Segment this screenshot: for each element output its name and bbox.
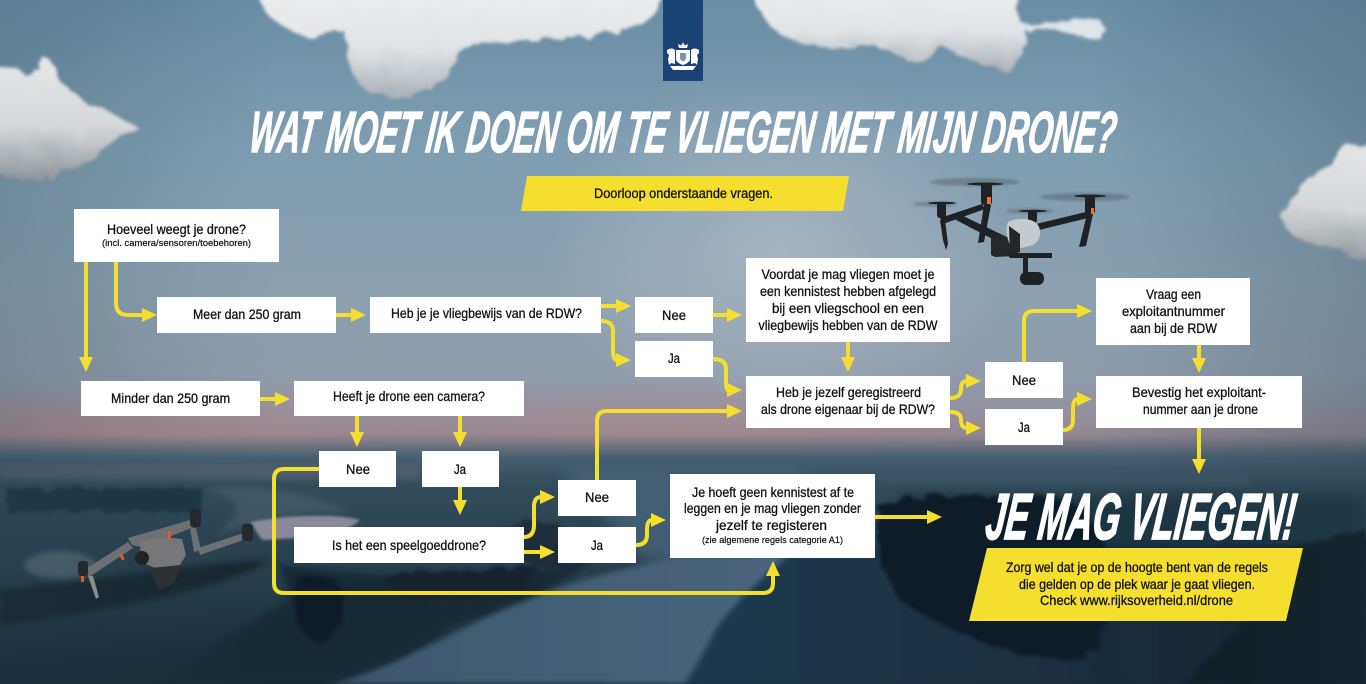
callout: regels ter plekke: Check www.rijksoverheid.nl/drone <box>1040 592 1233 608</box>
step: exploitantnummer aanvragen: Vraag een <box>1146 286 1201 302</box>
subtitle banner <box>521 176 849 211</box>
callout: regels ter plekke: die gelden op de plek waar je gaat vliegen. <box>1019 576 1255 592</box>
step: exploitantnummer bevestigen <box>1096 376 1302 428</box>
step: exploitantnummer aanvragen: exploitantnummer <box>1122 303 1225 319</box>
step: geregistreerd als eigenaar: Heb je jezelf geregistreerd <box>776 384 921 400</box>
step: exploitantnummer aanvragen <box>1096 278 1250 345</box>
step: geen kennistest: jezelf te registeren <box>715 517 827 533</box>
step: Nee speelgoeddrone: Nee <box>585 489 609 505</box>
step: Meer dan 250 gram <box>157 297 336 333</box>
step: Ja geregistreerd <box>985 409 1063 445</box>
step: kennistest <box>746 258 950 342</box>
step: Nee vliegbewijs <box>635 297 713 333</box>
cloud: top right <box>750 0 1108 70</box>
step: Ja speelgoeddrone <box>558 527 636 563</box>
step: kennistest: een kennistest hebben afgelegd <box>760 283 936 299</box>
step: kennistest: vliegbewijs hebben van de RDW <box>758 317 938 333</box>
cloud: right <box>1282 140 1366 262</box>
step: Heeft je drone een camera <box>294 381 524 416</box>
step: Minder dan 250 gram: Minder dan 250 gram <box>111 390 230 406</box>
icon: small drone bottom left <box>24 509 253 599</box>
step: exploitantnummer bevestigen: Bevestig het exploitant- <box>1132 384 1266 400</box>
step: Nee geregistreerd: Nee <box>1012 372 1036 388</box>
cloud: top left <box>258 0 660 97</box>
step: speelgoeddrone: Is het een speelgoeddrone? <box>332 537 486 553</box>
step: Hoeveel weegt je drone: Hoeveel weegt je drone? <box>107 221 246 237</box>
logo: Rijksoverheid crest <box>663 0 703 81</box>
step: Nee speelgoeddrone <box>558 480 636 516</box>
icon: large drone top right <box>913 178 1130 285</box>
callout: regels ter plekke <box>969 548 1303 621</box>
step: Heb je je vliegbewijs: Heb je je vliegbewijs van de RDW? <box>391 305 582 321</box>
flowchart arrows <box>86 262 1199 593</box>
step: geen kennistest: Je hoeft geen kennistest af te <box>692 484 854 500</box>
step: Nee geregistreerd <box>985 362 1063 398</box>
step: Ja camera <box>422 451 499 487</box>
step: geen kennistest: leggen en je mag vliegen zonder <box>684 500 861 516</box>
cloud: left <box>0 59 138 180</box>
step: Ja camera: Ja <box>454 461 466 477</box>
step: geen kennistest <box>670 474 875 558</box>
step: geen kennistest: (zie algemene regels categorie A1) <box>702 535 843 546</box>
subtitle banner: Doorloop onderstaande vragen. <box>594 185 773 201</box>
step: Meer dan 250 gram: Meer dan 250 gram <box>193 306 301 322</box>
step: Hoeveel weegt je drone <box>74 209 279 262</box>
step: Hoeveel weegt je drone: (incl. camera/sensoren/toebehoren) <box>102 238 251 249</box>
callout: regels ter plekke: Zorg wel dat je op de hoogte bent van de regels <box>1006 559 1268 575</box>
step: kennistest: bij een vliegschool en een <box>772 300 924 316</box>
step: speelgoeddrone <box>294 527 524 563</box>
step: Ja speelgoeddrone: Ja <box>591 537 603 553</box>
step: Ja vliegbewijs <box>635 341 713 377</box>
step: Heeft je drone een camera: Heeft je drone een camera? <box>333 388 485 404</box>
step: kennistest: Voordat je mag vliegen moet je <box>762 266 935 282</box>
step: Ja geregistreerd: Ja <box>1018 419 1030 435</box>
step: geregistreerd als eigenaar <box>746 376 950 428</box>
step: Ja vliegbewijs: Ja <box>668 350 680 366</box>
step: Heb je je vliegbewijs <box>370 297 601 333</box>
step: Minder dan 250 gram <box>81 381 260 416</box>
step: Nee camera: Nee <box>346 461 370 477</box>
step: geregistreerd als eigenaar: als drone eigenaar bij de RDW? <box>761 401 935 417</box>
step: Nee vliegbewijs: Nee <box>662 307 686 323</box>
step: exploitantnummer aanvragen: aan bij de RDW <box>1130 320 1218 336</box>
step: Nee camera <box>319 451 396 487</box>
step: exploitantnummer bevestigen: nummer aan je drone <box>1143 401 1258 417</box>
